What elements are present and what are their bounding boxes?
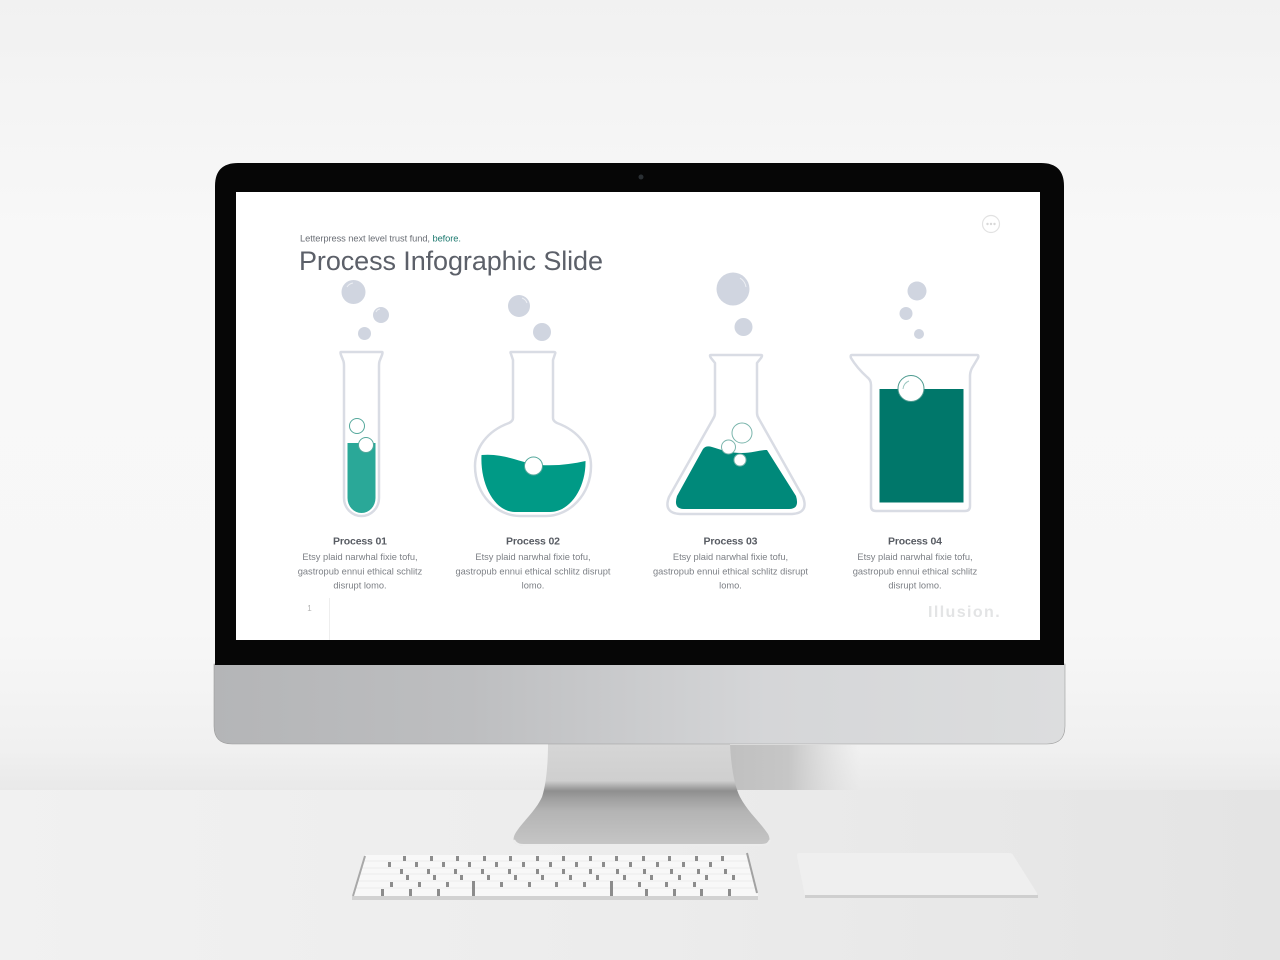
stand base highlight <box>514 840 770 845</box>
flask liquid <box>481 455 586 512</box>
icon: conical flask <box>667 272 805 514</box>
flask liquid <box>676 446 797 509</box>
beaker liquid <box>880 389 964 502</box>
caption: process 01 <box>298 536 423 590</box>
caption: process 01: disrupt lomo. <box>333 580 387 590</box>
caption: process 04: gastropub ennui ethical schlitz <box>853 566 978 576</box>
caption: process 02 <box>455 536 611 590</box>
monitor body <box>214 163 1065 744</box>
trackpad <box>797 853 1038 898</box>
tube liquid <box>348 443 376 513</box>
title: Process Infographic Slide <box>299 246 603 276</box>
caption: process 01: Etsy plaid narwhal fixie tofu, <box>302 552 418 562</box>
caption: process 01: Process 01 <box>333 536 387 548</box>
slide screen <box>236 192 1040 640</box>
caption: process 04: disrupt lomo. <box>888 580 942 590</box>
icon: round flask <box>475 295 591 516</box>
gray bubbles <box>508 295 530 317</box>
gray bubbles <box>900 282 926 339</box>
slide content <box>298 216 1001 640</box>
caption: process 04: Etsy plaid narwhal fixie tofu, <box>857 552 973 562</box>
caption: process 03: Etsy plaid narwhal fixie tofu, <box>673 552 788 562</box>
caption: process 02: Etsy plaid narwhal fixie tofu, <box>475 552 591 562</box>
gray bubbles <box>342 280 389 340</box>
webcam <box>638 174 644 180</box>
subtitle: Letterpress next level trust fund, before. <box>300 234 461 244</box>
caption: process 02: gastropub ennui ethical schlitz disrupt <box>455 566 611 576</box>
flask outline <box>667 355 805 514</box>
caption: process 03: Process 03 <box>704 536 758 548</box>
caption: process 04: Process 04 <box>888 536 942 548</box>
caption: process 02: Process 02 <box>506 536 560 548</box>
icon: beaker <box>851 282 978 511</box>
caption: process 02: lomo. <box>522 580 544 590</box>
caption: process 01: gastropub ennui ethical schlitz <box>298 566 423 576</box>
keyboard <box>352 853 758 900</box>
tube outline <box>340 352 382 516</box>
caption: process 03 <box>653 536 808 590</box>
liquid bubble <box>524 457 542 475</box>
flask outline <box>475 352 591 516</box>
liquid bubbles <box>350 418 364 434</box>
menu icon <box>982 216 1000 232</box>
page number: 1 <box>307 604 312 613</box>
liquid bubbles <box>732 423 752 443</box>
caption: process 03: gastropub ennui ethical schlitz disrupt <box>653 566 808 576</box>
caption: process 04 <box>853 536 978 590</box>
monitor stand <box>514 744 770 846</box>
key gaps <box>381 856 735 896</box>
beaker outline <box>851 355 978 511</box>
monitor black bezel <box>215 163 1064 665</box>
brand wordmark: Illusion. <box>928 604 1001 621</box>
icon: test tube <box>340 280 389 516</box>
keyboard body <box>352 855 758 900</box>
liquid bubble <box>898 376 924 402</box>
caption: process 03: lomo. <box>719 580 742 590</box>
gray bubbles <box>716 272 750 306</box>
monitor chin <box>214 664 1065 744</box>
